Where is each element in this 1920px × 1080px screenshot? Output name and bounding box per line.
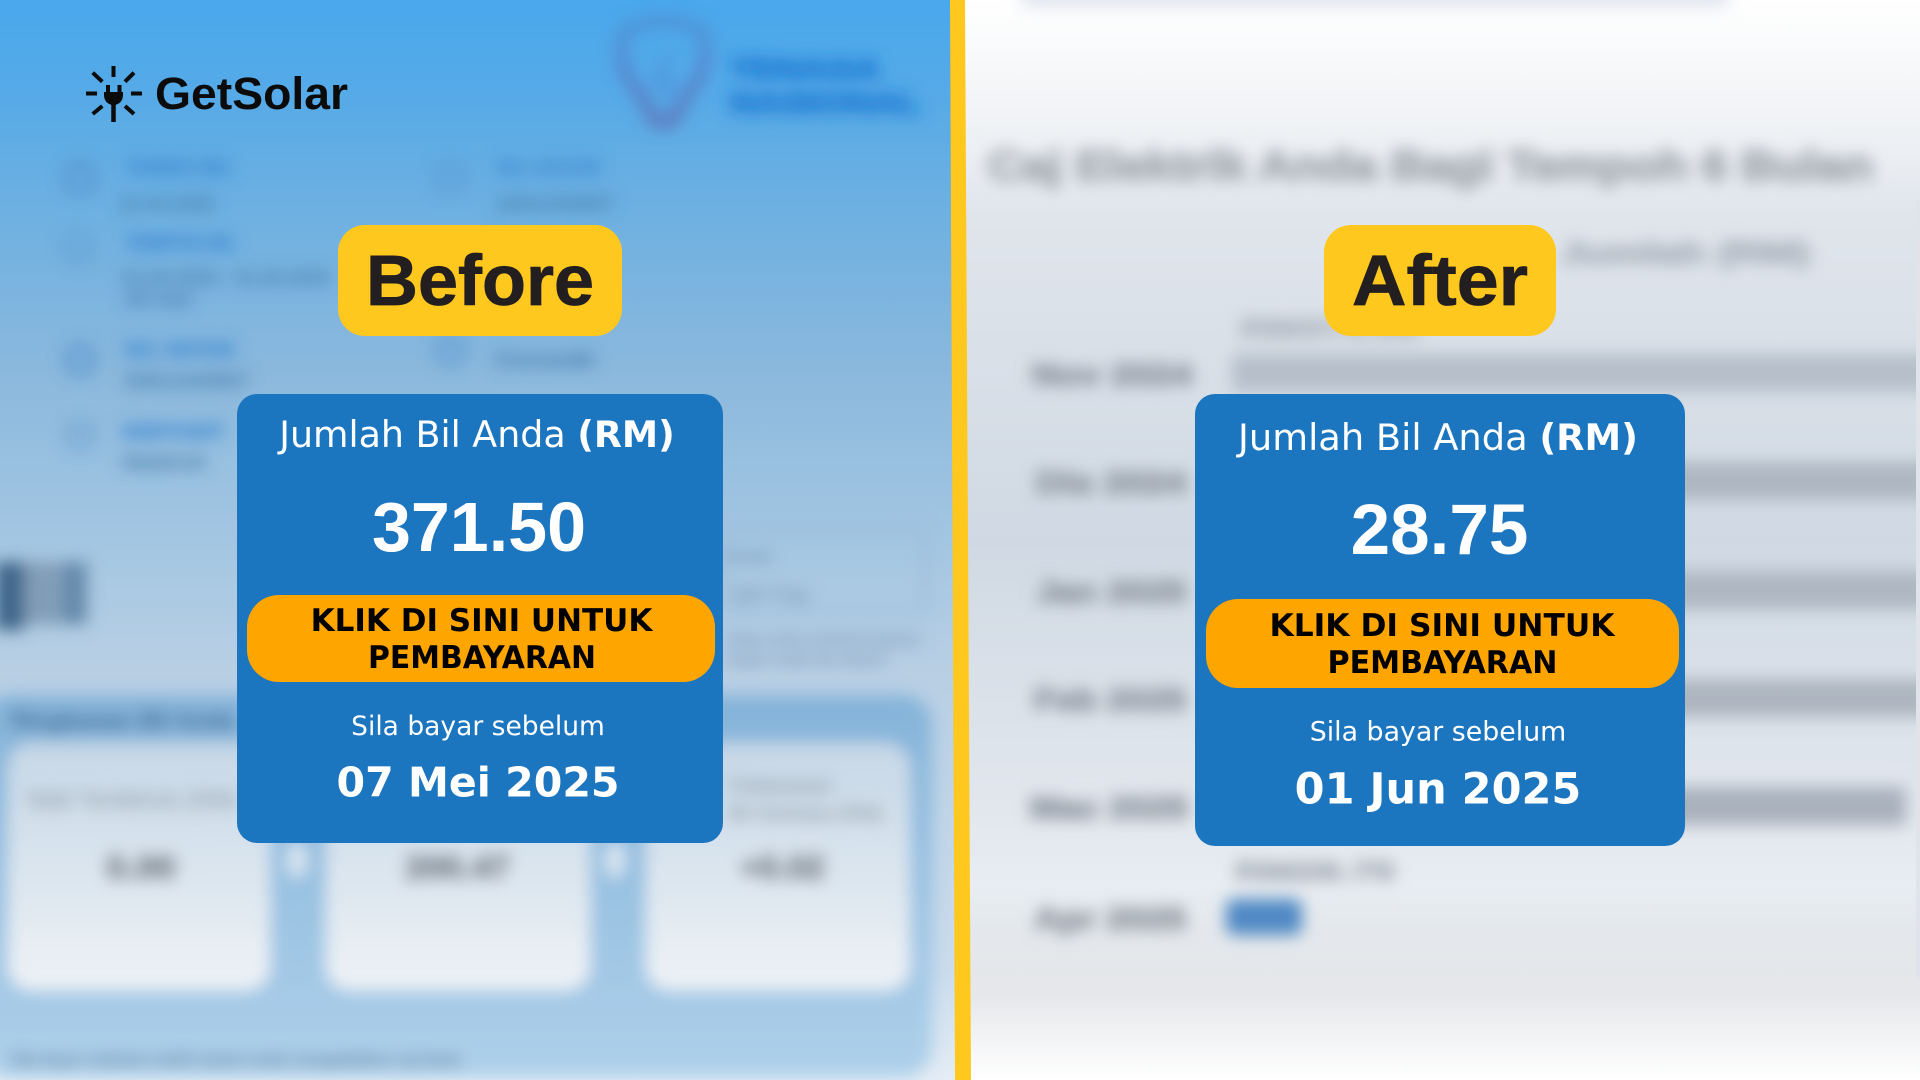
summary panel: +0.02 — [740, 849, 825, 887]
blurred utility logo and bill details: TENAGA — [730, 54, 880, 84]
summary panel: Baki Terdahulu (RM) — [28, 789, 238, 812]
summary panel: Ringkasan Bil Anda — [10, 707, 236, 735]
bar chart: Apr 2025 — [1034, 901, 1186, 936]
badge: Before — [338, 225, 622, 336]
summary panel — [0, 695, 932, 1077]
blurred utility logo and bill details: dengan mudah dan selamat — [725, 651, 885, 668]
bill label: Jumlah Bil Anda (RM) — [277, 413, 675, 456]
panel: after blurred usage chart background: Jumlah (RM) — [1560, 237, 1810, 270]
bar chart — [1030, 315, 1920, 936]
logo: GetSolar — [86, 66, 348, 122]
summary panel: Pelarasan — [728, 775, 833, 798]
blurred utility logo and bill details: TEMPOH BIL — [125, 233, 237, 253]
badge: After — [1324, 225, 1556, 336]
bar chart: Jan 2025 — [1036, 574, 1186, 609]
badge: Before: Before — [366, 242, 594, 321]
badge: After: After — [1352, 242, 1528, 321]
due date: 07 Mei 2025 — [336, 758, 620, 806]
blurred utility logo and bill details — [0, 21, 932, 1077]
summary panel: 0.00 — [106, 849, 176, 887]
blurred utility logo and bill details: NASIONAL — [730, 88, 920, 118]
due date label: Sila bayar sebelum — [351, 711, 605, 742]
card: after bill summary — [1195, 394, 1685, 846]
blurred utility logo and bill details: Imbas untuk membuat bayaran — [725, 631, 920, 648]
blurred utility logo and bill details: RM200.00 — [122, 453, 205, 473]
bar chart: Feb 2025 — [1034, 682, 1186, 717]
payment button: KLIK DI SINI UNTUK — [311, 603, 653, 639]
summary panel: Sila bayar sebelum tarikh tamat untuk mengelakkan caj lewat — [10, 1052, 461, 1069]
blurred utility logo and bill details: 01.04.2025 — [120, 194, 215, 214]
blurred utility logo and bill details: 5001234567 — [125, 371, 250, 391]
blurred utility logo and bill details: 01.03.2025 - 31.03.2025 — [122, 268, 330, 288]
payment button: PEMBAYARAN — [368, 640, 596, 676]
bar chart: Nov 2024 — [1032, 357, 1193, 392]
payment button — [1206, 599, 1679, 688]
blurred utility logo and bill details: DEPOSIT — [122, 422, 225, 442]
summary panel: 200.47 — [405, 849, 510, 887]
blurred utility logo and bill details: 2201234567 — [495, 194, 615, 214]
panel: after blurred usage chart background — [960, 0, 1920, 1080]
summary panel: Bil Semasa (RM) — [728, 802, 883, 825]
chart heading: Caj Elektrik Anda Bagi Tempoh 6 Bulan — [988, 142, 1873, 189]
barcode — [0, 562, 87, 630]
blurred utility logo and bill details: QR Pay — [730, 585, 811, 604]
payment button: PEMBAYARAN — [1328, 645, 1558, 681]
bill label: Jumlah Bil Anda (RM) — [1236, 416, 1638, 459]
panel: before blurred bill background — [0, 0, 960, 1080]
bar chart: Dis 2024 — [1036, 465, 1187, 500]
bill amount: 371.50 — [372, 488, 586, 566]
blurred utility logo and bill details: 30 hari — [125, 289, 192, 309]
divider: yellow slanted line — [950, 0, 971, 1080]
blurred utility logo and bill details: Kod — [725, 547, 770, 566]
bar chart: RM28.75 — [1235, 858, 1395, 886]
due date label: Sila bayar sebelum — [1310, 716, 1566, 748]
due date: 01 Jun 2025 — [1295, 764, 1581, 814]
bar chart: RM371.50 — [1240, 315, 1420, 343]
payment button — [247, 595, 715, 682]
icon: sun with plug — [86, 66, 142, 122]
blurred utility logo and bill details: Domestik — [495, 350, 596, 370]
blurred utility logo and bill details: TARIKH BIL — [125, 158, 233, 178]
payment button: KLIK DI SINI UNTUK — [1269, 608, 1616, 644]
blurred utility logo and bill details: NO. AKAUN — [497, 158, 600, 178]
bill amount: 28.75 — [1351, 491, 1528, 570]
card: before bill summary — [237, 394, 723, 843]
blurred utility logo and bill details: NO. INVOIS — [125, 340, 235, 360]
logo: GetSolar: GetSolar — [155, 68, 348, 119]
bar chart: Mac 2025 — [1030, 790, 1188, 825]
